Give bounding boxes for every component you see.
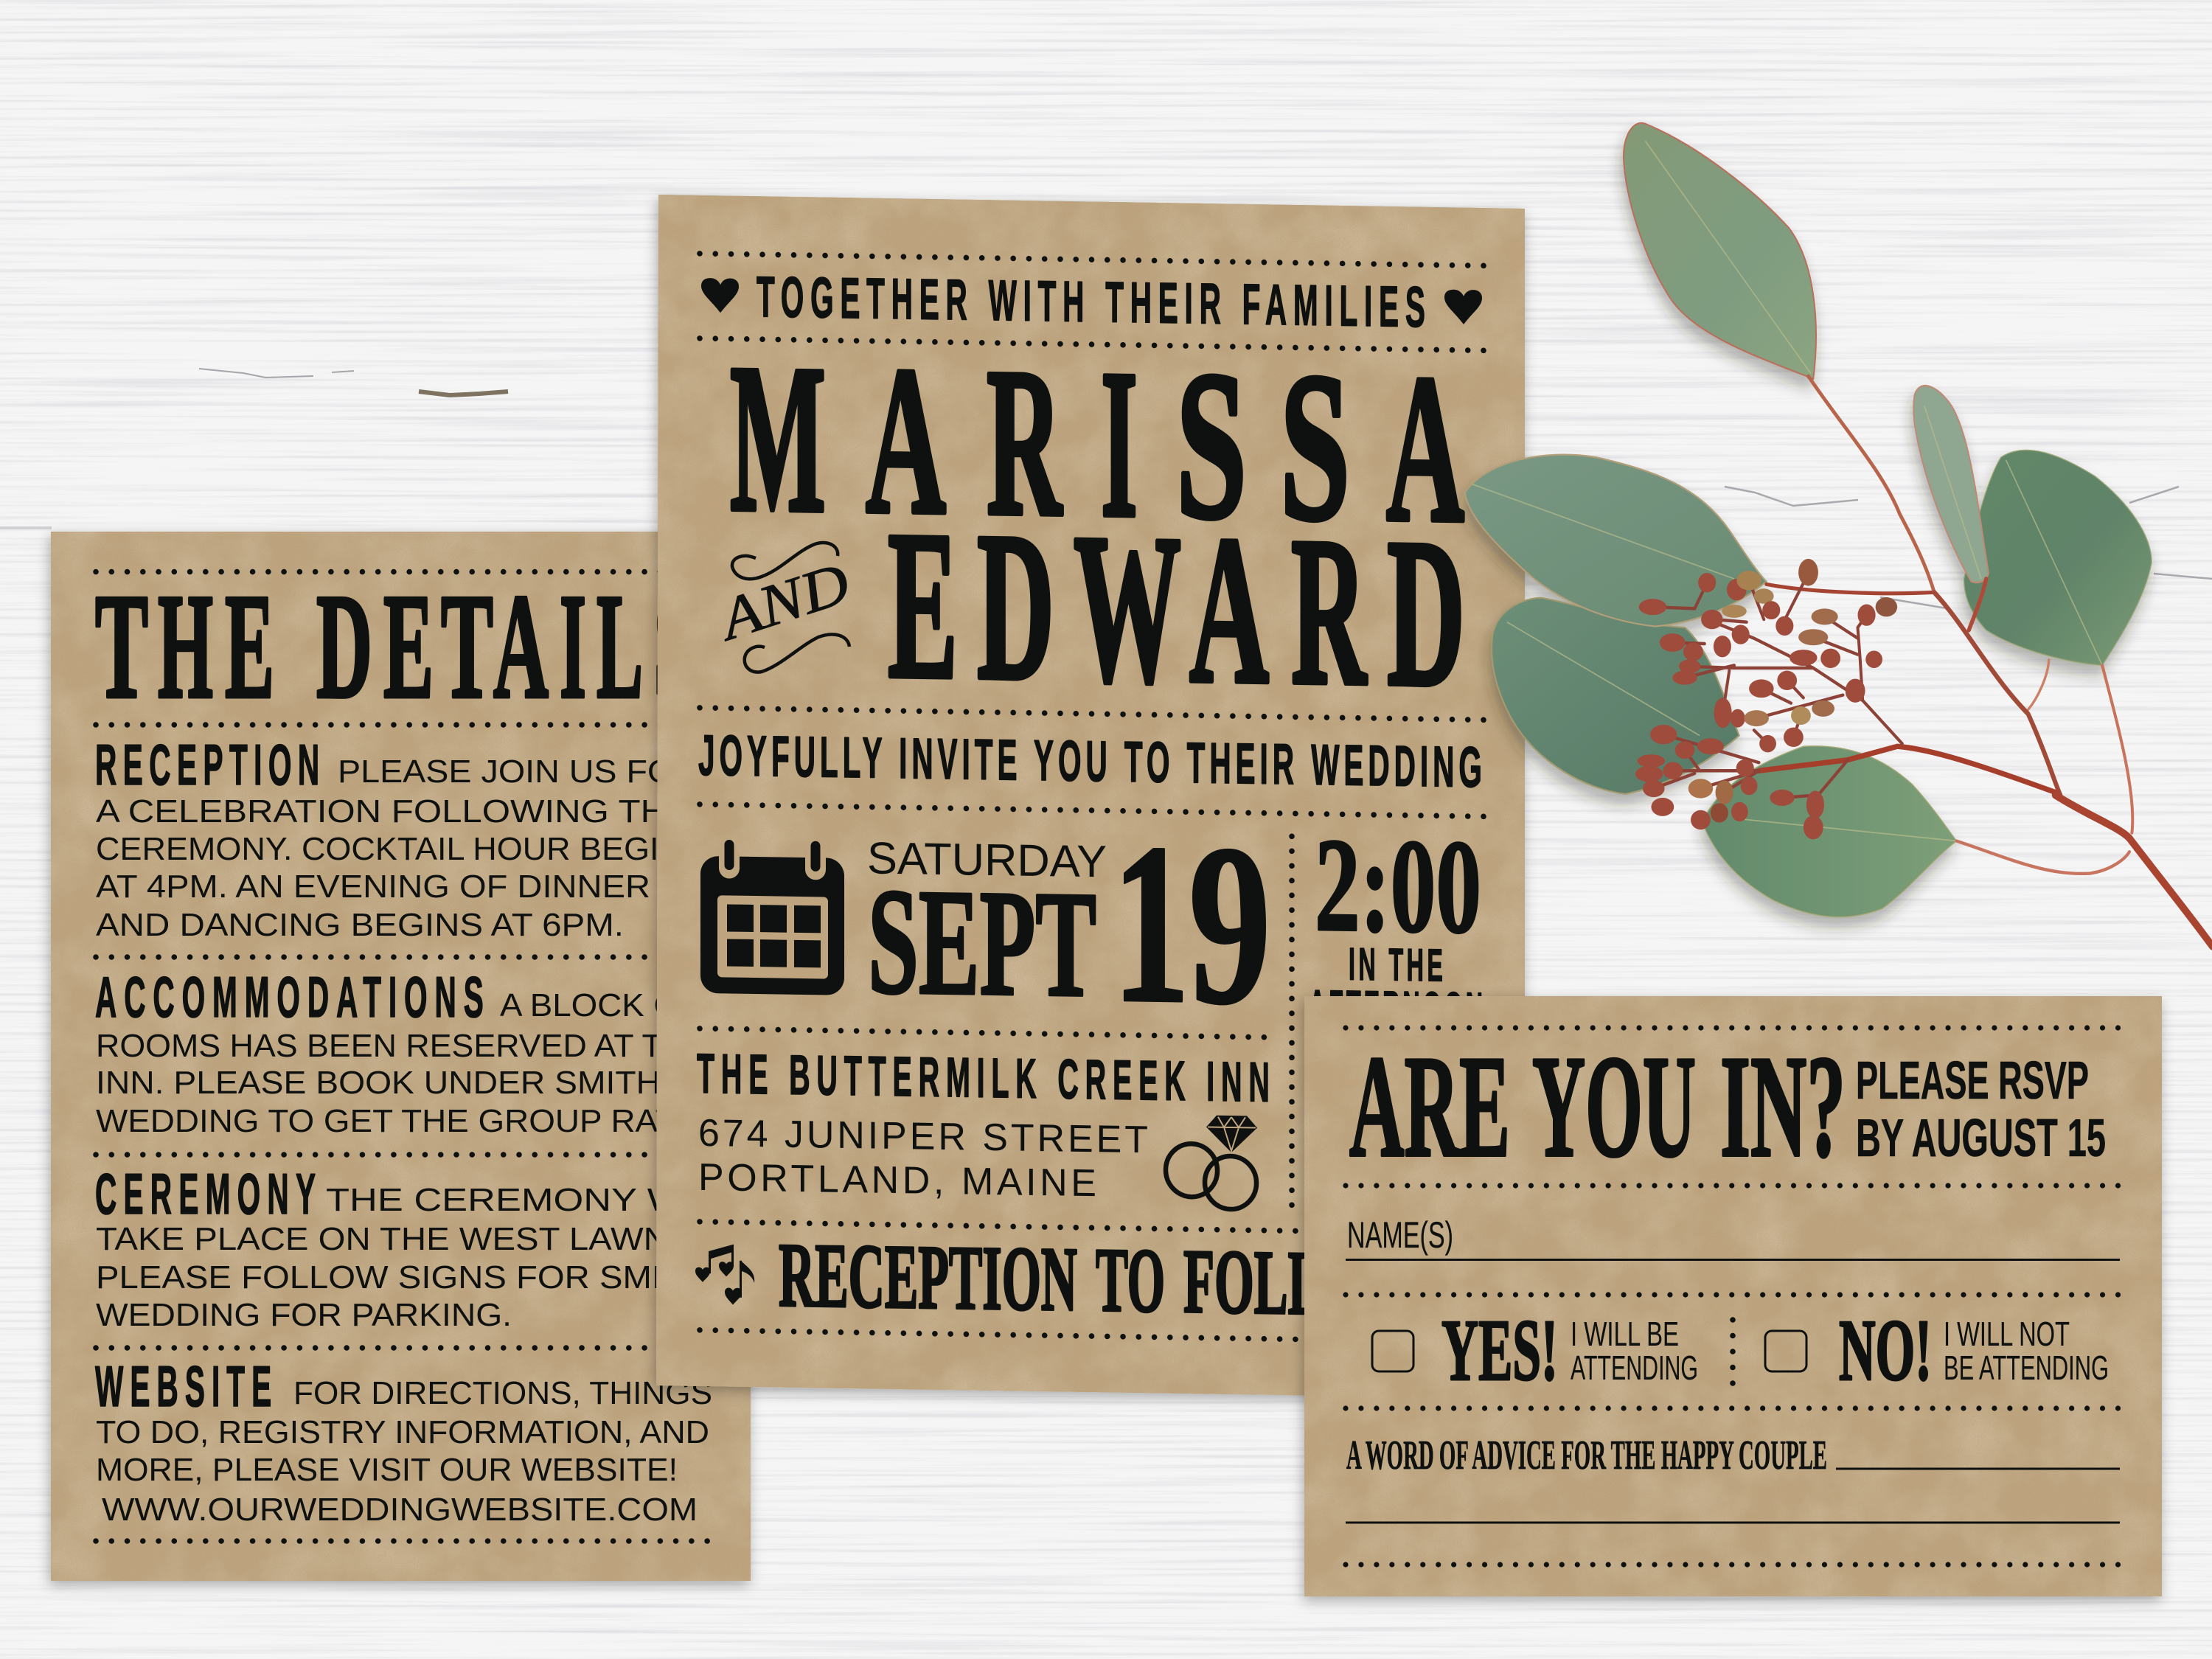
icon: music notes bbox=[695, 1244, 754, 1305]
time label: in the afternoon: IN THE bbox=[1349, 939, 1443, 991]
option: no: BE ATTENDING bbox=[1944, 1349, 2109, 1387]
leaf: lower left bbox=[1492, 598, 1739, 794]
option: no bbox=[1765, 1301, 2109, 1399]
subheading: joyfully invite: JOYFULLY INVITE YOU TO THEIR WEDDING bbox=[698, 724, 1482, 800]
icon: calendar bbox=[700, 844, 844, 995]
heading: the details: L bbox=[597, 563, 643, 730]
heading: together with their families: TOGETHER WITH THEIR FAMILIES bbox=[757, 265, 1425, 340]
illustration: eucalyptus branch bbox=[1465, 123, 2212, 946]
option: no: NO! bbox=[1839, 1301, 1932, 1399]
leaf: right bbox=[1964, 450, 2152, 665]
name: edward: E bbox=[888, 487, 958, 723]
icon: heart right bbox=[1444, 290, 1482, 324]
option: yes: YES! bbox=[1441, 1301, 1558, 1399]
reception to follow: TO bbox=[1096, 1229, 1165, 1332]
field: word of advice bbox=[1346, 1433, 2120, 1523]
option: yes bbox=[1372, 1301, 1698, 1399]
address: PORTLAND, MAINE bbox=[698, 1156, 1096, 1205]
address bbox=[698, 1112, 1148, 1206]
text block: reception: PLEASE JOIN US FOR bbox=[338, 754, 699, 790]
name: marissa: S bbox=[1176, 327, 1247, 563]
time: 2:00: 2:00 bbox=[1315, 811, 1481, 961]
leaf: upper left bbox=[1465, 455, 1767, 627]
flourish: and: AND bbox=[709, 550, 858, 654]
text block: accommodations: INN. PLEASE BOOK UNDER SMITH bbox=[96, 1065, 661, 1101]
heading: the details: A bbox=[493, 563, 549, 730]
text block: ceremony: THE CEREMONY WILL bbox=[326, 1182, 737, 1218]
text block: ceremony: WEDDING FOR PARKING. bbox=[96, 1297, 512, 1333]
panel: the details card bbox=[51, 532, 751, 1581]
text block: reception: AND DANCING BEGINS AT 6PM. bbox=[96, 907, 624, 943]
heading: the details: E bbox=[383, 563, 434, 730]
icon: heart left bbox=[701, 278, 739, 313]
date: 19: 9 bbox=[1189, 797, 1271, 1053]
text block: website: WWW.OURWEDDINGWEBSITE.COM bbox=[102, 1492, 698, 1528]
option: yes: ATTENDING bbox=[1571, 1349, 1698, 1387]
date: saturday: SATURDAY bbox=[867, 832, 1107, 886]
heading: the details: T bbox=[441, 563, 493, 730]
heading: the details: S bbox=[653, 563, 706, 730]
heading: are you in bbox=[1349, 1026, 1846, 1187]
bud branches bbox=[1652, 574, 1902, 804]
heading: the details: I bbox=[560, 563, 586, 730]
text block: website bbox=[95, 1355, 712, 1528]
venue name: THE BUTTERMILK CREEK INN bbox=[697, 1042, 1270, 1113]
flourish: and bbox=[709, 543, 858, 672]
text block: website: FOR DIRECTIONS, THINGS bbox=[293, 1375, 712, 1411]
name: edward: D bbox=[1387, 495, 1465, 731]
leaf: bottom bbox=[1702, 746, 1957, 917]
text block: ceremony bbox=[95, 1163, 737, 1333]
text block: accommodations: ROOMS HAS BEEN RESERVED AT THE bbox=[96, 1028, 708, 1064]
date: sept: SEPT bbox=[868, 856, 1096, 1029]
name: marissa: R bbox=[987, 324, 1063, 561]
heading: are you in: YOU bbox=[1532, 1026, 1696, 1187]
time label: in the afternoon bbox=[1309, 938, 1483, 1034]
text block: website: WEBSITE bbox=[95, 1355, 271, 1419]
heading: the details: H bbox=[158, 563, 213, 730]
option: yes: I WILL BE bbox=[1571, 1315, 1679, 1353]
text block: website: MORE, PLEASE VISIT OUR WEBSITE! bbox=[96, 1452, 678, 1488]
option: no: I WILL NOT bbox=[1944, 1315, 2070, 1353]
text block: ceremony: CEREMONY bbox=[95, 1163, 316, 1227]
text block: accommodations bbox=[95, 966, 708, 1139]
heading: the details bbox=[95, 563, 706, 730]
text block: ceremony: TAKE PLACE ON THE WEST LAWN. bbox=[96, 1221, 678, 1257]
name: marissa: I bbox=[1101, 326, 1138, 562]
text block: reception bbox=[95, 734, 705, 943]
address: 674 JUNIPER STREET bbox=[698, 1112, 1148, 1161]
field: names: NAME(S) bbox=[1347, 1214, 1453, 1256]
name: edward: A bbox=[1189, 492, 1269, 728]
panel: rsvp card bbox=[1304, 996, 2162, 1596]
name: marissa: A bbox=[866, 322, 946, 559]
text block: reception: A CELEBRATION FOLLOWING THE bbox=[96, 793, 691, 830]
time label: in the afternoon: AFTERNOON bbox=[1309, 981, 1483, 1034]
reception to follow: RECEPTION bbox=[779, 1225, 1077, 1330]
panel: main invitation card bbox=[656, 195, 1525, 1399]
text block: reception: CEREMONY. COCKTAIL HOUR BEGINS bbox=[96, 831, 705, 867]
rsvp by date bbox=[1856, 1051, 2106, 1168]
name: edward: D bbox=[977, 489, 1054, 725]
name: marissa: S bbox=[1280, 329, 1350, 566]
heading: are you in: IN? bbox=[1720, 1026, 1846, 1187]
invitation content bbox=[695, 254, 1485, 1342]
leaf: top bbox=[1624, 123, 1816, 379]
flower buds bbox=[1635, 559, 1897, 839]
heading: are you in: ARE bbox=[1349, 1026, 1510, 1187]
name: marissa bbox=[730, 321, 1464, 567]
leaves bbox=[1465, 123, 2152, 917]
name: marissa: M bbox=[730, 321, 826, 557]
stems bbox=[1759, 376, 2212, 946]
date: 19: 1 bbox=[1112, 796, 1190, 1051]
text block: accommodations: ACCOMMODATIONS bbox=[95, 966, 484, 1030]
leaf: narrow bbox=[1913, 386, 1989, 582]
text block: reception: AT 4PM. AN EVENING OF DINNER bbox=[96, 869, 650, 905]
name: edward bbox=[888, 487, 1465, 731]
text block: accommodations: WEDDING TO GET THE GROUP RATE. bbox=[96, 1103, 708, 1139]
name: marissa: A bbox=[1386, 330, 1464, 567]
heading: the details: E bbox=[225, 563, 274, 730]
name: edward: R bbox=[1291, 493, 1368, 730]
heading: the details: D bbox=[316, 563, 372, 730]
name: edward: W bbox=[1074, 490, 1181, 727]
heading: the details: T bbox=[95, 563, 148, 730]
icon: diamond and rings bbox=[1166, 1115, 1257, 1210]
text block: ceremony: PLEASE FOLLOW SIGNS FOR SMITH bbox=[96, 1259, 708, 1295]
text block: reception: RECEPTION bbox=[95, 734, 319, 798]
leaf midribs bbox=[1472, 141, 2102, 841]
text block: website: TO DO, REGISTRY INFORMATION, AND bbox=[96, 1414, 709, 1450]
text block: accommodations: A BLOCK OF bbox=[500, 987, 700, 1023]
reception to follow: FOLLOW bbox=[1183, 1231, 1412, 1335]
